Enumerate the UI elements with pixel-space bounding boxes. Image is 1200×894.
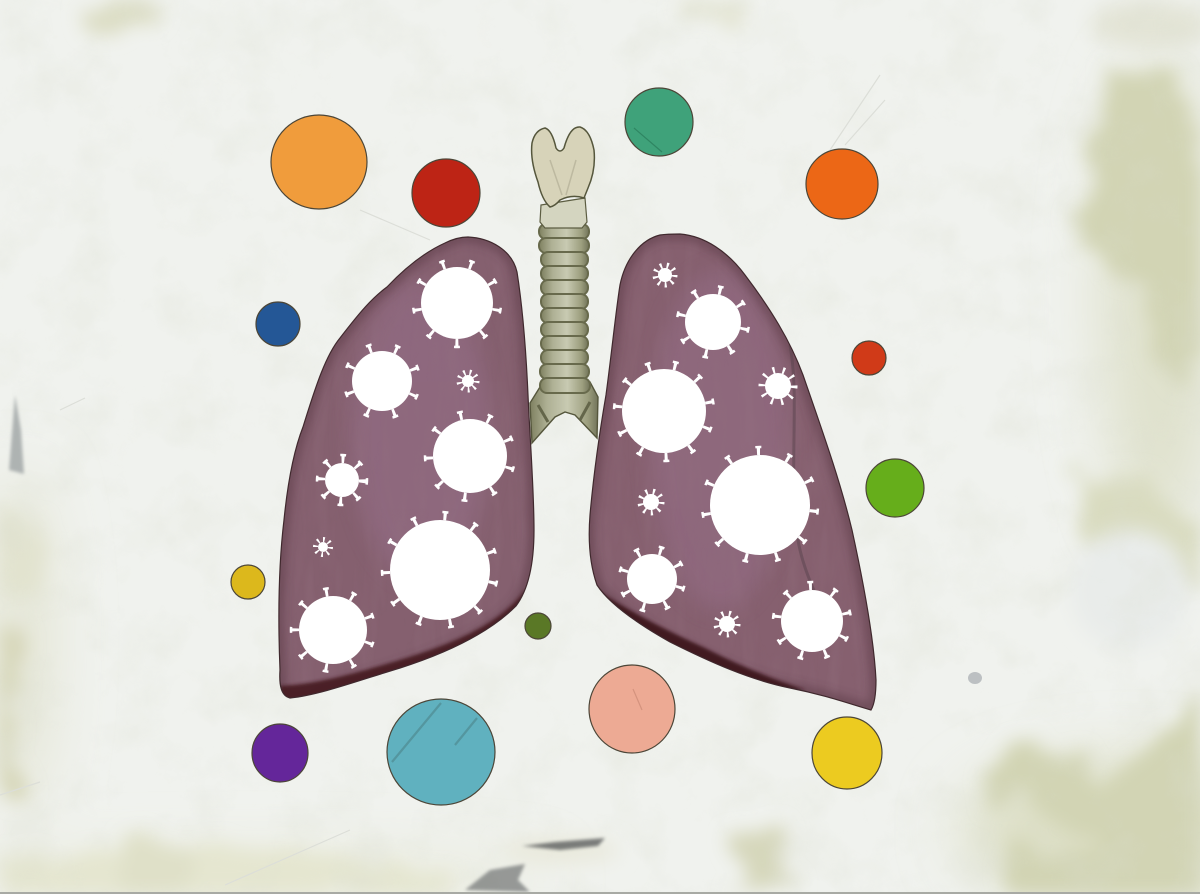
virus bbox=[460, 372, 476, 390]
virus cells bbox=[600, 266, 864, 673]
virus bbox=[371, 501, 509, 639]
virus bbox=[407, 253, 507, 353]
windpipe rings bbox=[539, 224, 590, 393]
sphere: yellow bbox=[812, 717, 882, 789]
larynx bbox=[532, 127, 594, 207]
sphere: olive bbox=[525, 613, 551, 639]
bronchi bbox=[530, 382, 598, 443]
sphere: teal bbox=[387, 699, 495, 805]
virus cells bbox=[280, 253, 525, 683]
virus bbox=[640, 492, 662, 512]
virus bbox=[600, 347, 728, 475]
sphere: blue bbox=[256, 302, 300, 346]
virus bbox=[671, 280, 755, 364]
virus bbox=[333, 332, 431, 430]
virus bbox=[316, 540, 330, 554]
virus bbox=[656, 266, 674, 284]
sphere: orange-red bbox=[806, 149, 878, 219]
sphere: orange bbox=[271, 115, 367, 209]
sphere: small yellow bbox=[231, 565, 265, 599]
sphere: purple bbox=[252, 724, 308, 782]
left lung bbox=[278, 236, 535, 699]
right lung bbox=[588, 233, 877, 711]
sphere: green bbox=[625, 88, 693, 156]
virus bbox=[716, 614, 738, 634]
virus bbox=[317, 455, 367, 505]
virus bbox=[697, 442, 823, 568]
cricoid bbox=[540, 198, 587, 228]
sphere: lime green bbox=[866, 459, 924, 517]
virus bbox=[280, 577, 386, 683]
virus bbox=[762, 370, 794, 402]
smudges and marks bbox=[9, 395, 24, 474]
virus bbox=[415, 401, 525, 511]
sphere: red bbox=[412, 159, 480, 227]
sphere: peach bbox=[589, 665, 675, 753]
virus bbox=[760, 569, 864, 673]
colored spheres bbox=[231, 88, 924, 805]
trachea bbox=[530, 127, 598, 443]
sphere: small red bbox=[852, 341, 886, 375]
virus bbox=[612, 539, 692, 619]
